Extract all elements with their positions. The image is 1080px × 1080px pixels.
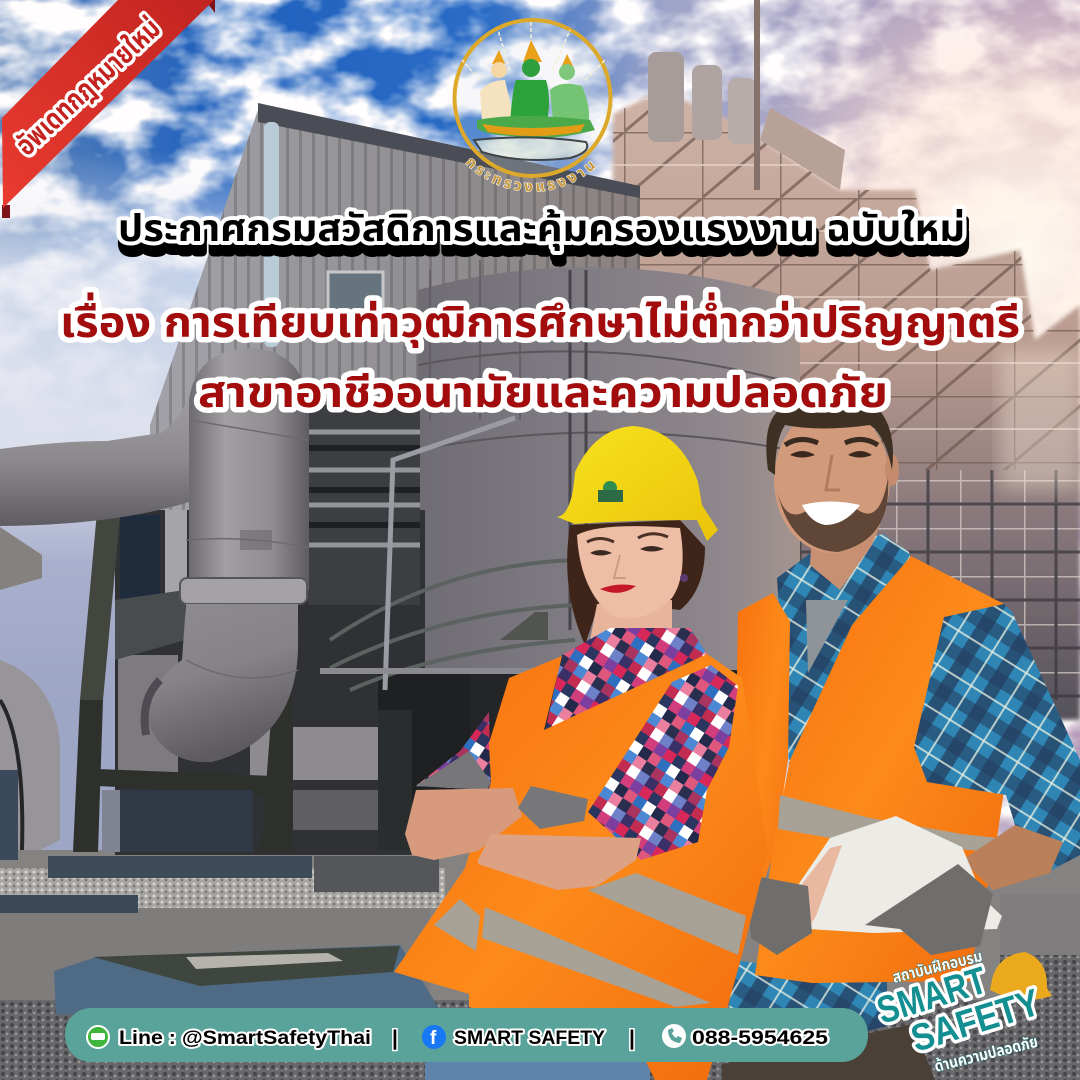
heading line 1: black with shadow: ประกาศกรมสวัสดิการและคุ้มครองแรงงาน ฉบับใหม่ [118,208,965,251]
separator 2: | [629,1027,635,1050]
man: right glove [865,864,993,955]
woman: glove on upper arm [416,751,491,790]
woman: left sleeve [416,712,491,790]
man: helmet brim shadow [777,845,842,929]
man: vest reflective stripe [778,795,997,851]
separator 1: | [392,1027,398,1050]
logo: three deity figures [477,40,595,138]
Line handle: Line : @SmartSafetyThai [119,1028,371,1049]
background: ground [0,850,1080,1080]
woman: yellow hard hat [557,426,718,541]
man: gray t-shirt [806,600,848,673]
background: dark machinery and steel frame [0,405,770,913]
heading line 2: red subject: เรื่อง การเทียบเท่าวุฒิการศึกษาไม่ต่ำกว่าปริญญาตรี [60,292,1020,348]
woman: upper forearm [405,788,522,860]
logo: training institute tagline: สถาบันฝึกอบรม [891,948,984,987]
Smart Safety logo [872,948,1052,1076]
background: grey factory building [150,103,640,720]
man: orange safety vest [733,556,1006,983]
background: right steel structure [613,0,1080,720]
man: shirt torso and collar [777,534,930,780]
man: smile [802,502,860,525]
icon: phone [662,1024,686,1048]
man: neck [810,525,880,590]
phone number: 088-5954625 [692,1028,829,1049]
icon: Facebook: f [430,1028,437,1049]
woman: plaid sleeve [588,665,738,860]
man: shirt below vest [729,960,887,1060]
woman: earring [680,574,688,582]
man: trousers [722,1024,935,1080]
woman: face [577,526,683,618]
woman: collar and shirt [544,628,707,735]
woman: eyes [590,546,664,556]
man in orange vest [722,400,1080,1080]
logo: orange helmet [990,952,1052,1000]
woman: orange safety vest [394,654,768,1080]
woman in orange vest [394,426,768,1080]
dome and cables at left edge [0,527,60,860]
background: central silo tank [418,260,800,720]
logo: radiating rays [462,22,605,80]
woman: jeans [425,1060,650,1080]
woman: right glove [518,786,588,829]
green steel frame [73,443,293,852]
logo: curved ministry name: กระทรวงแรงงาน [464,158,596,192]
man: white helmet [777,816,1002,933]
badge ribbon: update new law [2,0,215,218]
man: nose [826,455,840,490]
woman: vest reflective stripes [434,873,746,1007]
contact bar [65,1008,868,1062]
man: ear [885,454,899,486]
man: hair [766,400,893,475]
heading line 1: black with shadow: ประกาศกรมสวัสดิการและคุ้มครองแรงงาน ฉบับใหม่ [120,219,967,262]
woman: neck [590,600,672,668]
logo: cloud base [474,137,587,160]
man: face [774,407,890,553]
woman: hair [567,520,705,645]
logo: occupational safety tagline: ด้านความปลอดภัย [933,1033,1040,1076]
icon: Facebook [422,1025,446,1049]
Facebook name: SMART SAFETY [454,1028,605,1049]
woman: hat badge [598,481,623,502]
logo: Ministry of Labour emblem [452,18,612,192]
woman: eyebrows [587,534,668,542]
heading line 3: red field of study: สาขาอาชีวอนามัยและความปลอดภัย [198,369,888,417]
logo: SAFETY: SAFETY [906,982,1045,1061]
man: forearm [962,825,1063,890]
woman: lower forearm [478,834,641,890]
man: left glove [749,877,812,955]
man: beard [777,478,888,552]
logo: SMART: SMART [872,960,992,1033]
man: eyebrows [785,439,878,445]
man: plaid sleeve [914,604,1080,873]
woman: lips [600,585,636,593]
woman: nose [614,555,626,578]
icon: Line [87,1026,109,1048]
concrete utility box [54,945,440,1015]
man: eyes [790,451,872,458]
background: large silver pipe [0,348,309,762]
